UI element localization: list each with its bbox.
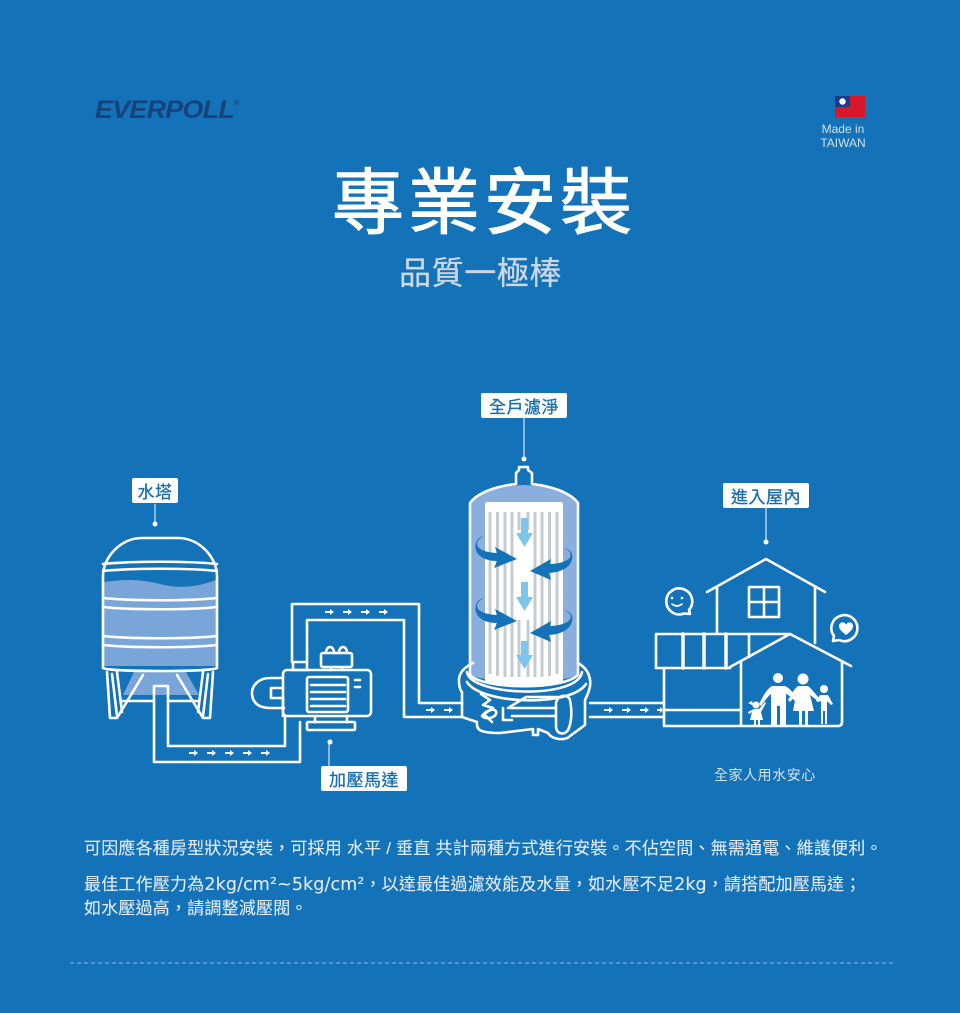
label: booster pump: 加壓馬達 (329, 771, 399, 790)
description lines 2 and 3: 最佳工作壓力為2kg/cm²~5kg/cm²，以達最佳過濾效能及水量，如水壓不足2kg，請搭配加壓馬達； (84, 875, 862, 895)
label: water tower (132, 478, 178, 503)
flow arrows (325, 609, 453, 713)
family figures (748, 673, 833, 725)
house (656, 559, 851, 726)
pipe from filter to house (590, 703, 664, 717)
water flow arrows (516, 518, 533, 669)
callout connectors (152, 418, 768, 768)
label: whole-house filtration (481, 393, 567, 418)
swirl arrows (475, 536, 572, 642)
filter housing (470, 467, 578, 687)
made in Taiwan text: TAIWAN (820, 136, 866, 150)
description line 1: 可因應各種房型狀況安裝，可採用 水平 / 垂直 共計兩種方式進行安裝。不佔空間、無需通電、維護便利。 (84, 839, 883, 858)
label: booster pump (321, 766, 407, 791)
made in Taiwan badge (820, 96, 866, 150)
made in Taiwan text: Made in (822, 122, 864, 136)
subtitle: 品質一極棒 (399, 255, 562, 291)
title: 專業安裝 (332, 164, 636, 244)
pipe from tank to pump (154, 686, 300, 762)
filter base and valve (459, 663, 590, 739)
made in Taiwan text (820, 122, 866, 150)
description lines 2 and 3: 如水壓過高，請調整減壓閥。 (84, 899, 308, 918)
label: water tower: 水塔 (138, 483, 172, 502)
flow arrows (604, 707, 663, 713)
brand logo: EVERPOLL® (95, 96, 239, 124)
water tank (103, 538, 217, 718)
cartridge pleats (490, 512, 557, 677)
flow arrows (189, 750, 270, 756)
description lines 2 and 3 (84, 875, 862, 918)
dashed divider (70, 962, 893, 964)
icon: heart speech bubble (831, 615, 857, 641)
family caption: 全家人用水安心 (714, 767, 816, 783)
icon: smile speech bubble (666, 588, 692, 614)
icon: Taiwan flag (835, 96, 865, 117)
pressure pump (252, 647, 371, 730)
label: enter the home (723, 483, 809, 508)
label: whole-house filtration: 全戶濾淨 (489, 398, 559, 417)
label: enter the home: 進入屋內 (731, 488, 801, 507)
pipe from pump to filter (292, 604, 462, 717)
